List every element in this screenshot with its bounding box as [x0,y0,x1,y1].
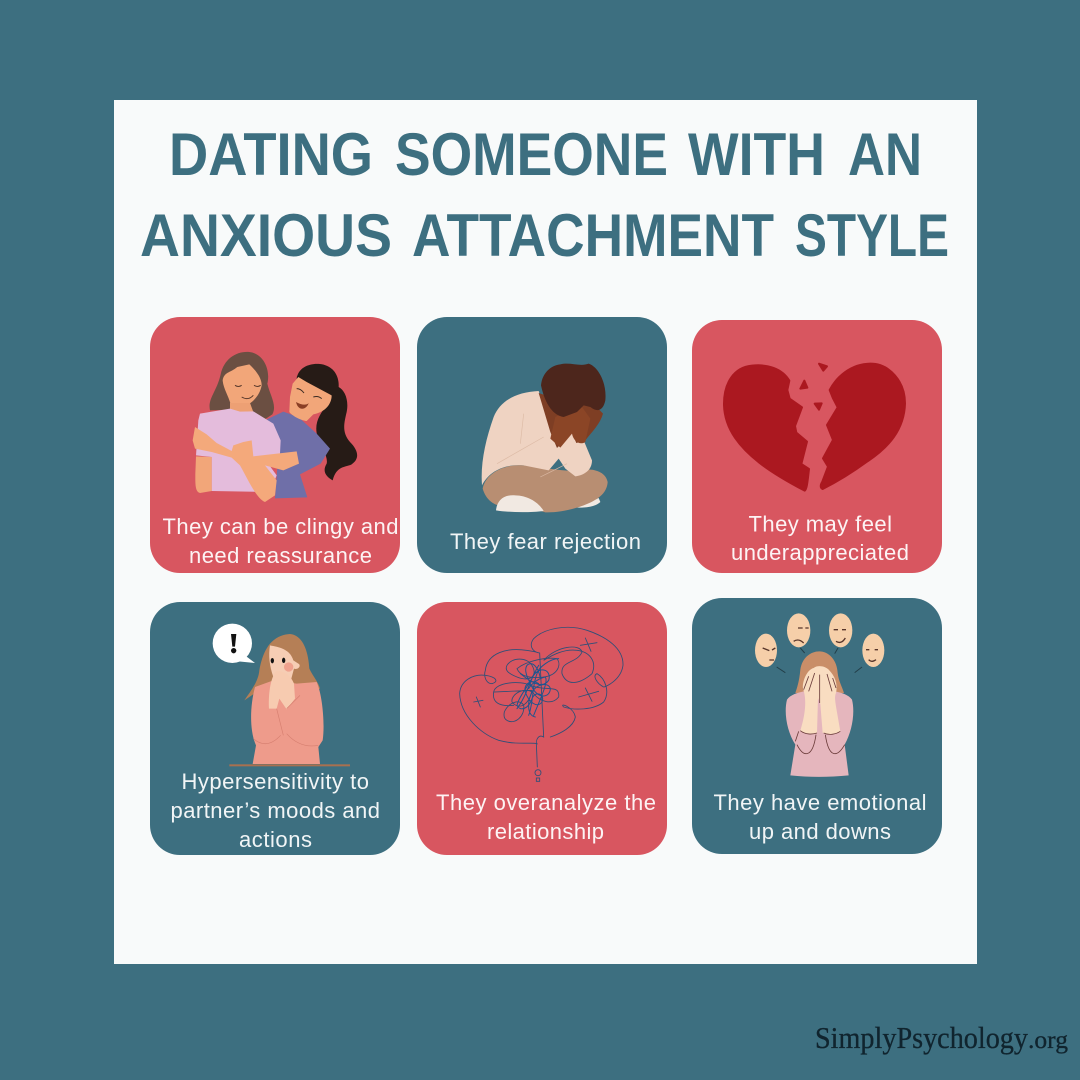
caption: They overanalyze the [436,790,656,815]
illustration: woman covering face with four mood faces [755,613,884,777]
caption: They may feel [748,512,892,536]
illustration: tangled thoughts scribble [460,627,623,781]
title: ATTACHMENT [412,202,774,269]
illustration: person sitting with head in hands [482,364,608,512]
panel: overanalyze [417,602,667,855]
caption [170,769,380,852]
title: AN [848,121,922,188]
panel: hypersensitivity [150,602,400,855]
caption: They have emotional [714,790,926,815]
panel: fear of rejection [417,317,667,573]
caption: up and downs [749,819,891,844]
caption: actions [239,827,312,852]
footer: source wordmark: .org [1028,1027,1069,1054]
caption: underappreciated [731,540,909,565]
caption [162,514,398,568]
icon: broken heart [724,364,905,491]
footer: source wordmark: SimplyPsychology [815,1020,1028,1055]
caption: relationship [487,819,604,844]
caption: They fear rejection [450,529,641,554]
illustration: worried woman with speech bubble [213,624,350,766]
caption: partner’s moods and [170,798,380,823]
caption [714,790,926,844]
title: STYLE [795,202,949,269]
panel: clingy [150,317,400,573]
white content panel [114,100,977,964]
panel: underappreciated [692,320,942,573]
caption [436,790,656,844]
caption: need reassurance [189,543,372,568]
caption [731,512,909,565]
panel: emotional ups and downs [692,598,942,854]
illustration: two women hugging [193,352,357,502]
title: DATING [169,121,373,188]
title: ANXIOUS [140,202,392,269]
title: SOMEONE [395,121,668,188]
title: WITH [688,121,825,188]
title [140,121,949,269]
caption: Hypersensitivity to [182,769,369,794]
caption: They can be clingy and [162,514,398,539]
